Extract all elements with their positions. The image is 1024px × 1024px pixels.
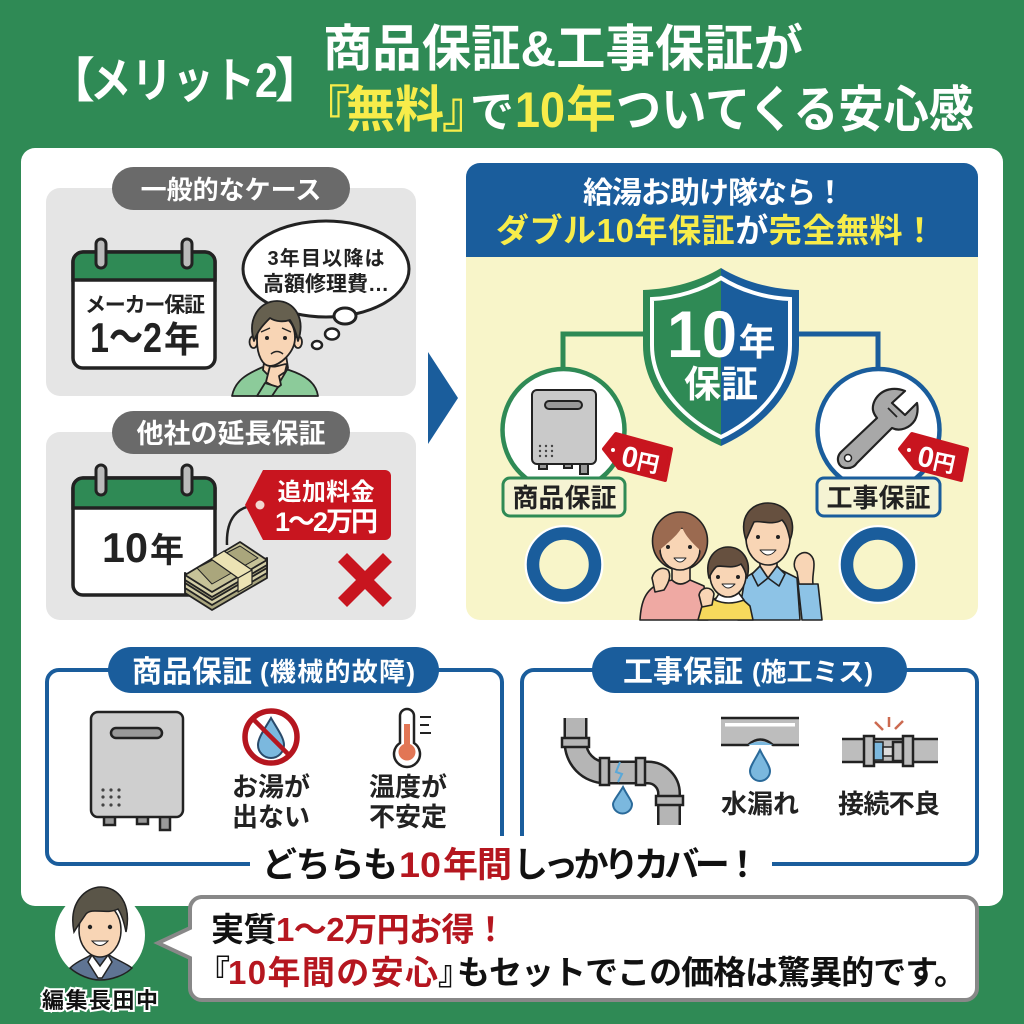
title: merit 2: 『	[300, 82, 350, 138]
product warranty	[502, 369, 671, 516]
heading: general case: 一般的なケース	[141, 175, 321, 205]
son	[698, 547, 753, 620]
icon: shield 10 year warranty: 年	[738, 322, 776, 363]
label: construction: 工事保証	[826, 483, 931, 513]
panel: other company extended warranty	[46, 411, 416, 620]
icon: thermometer	[394, 709, 431, 767]
banner: both covered for 10 years: しっかりカバー！	[513, 846, 760, 885]
tag: zero yen: 0円	[619, 441, 663, 480]
label: editor name: 編集長田中	[42, 988, 158, 1013]
faces	[666, 535, 780, 588]
thought bubble: 3年目以降は	[268, 247, 384, 270]
icon: calendar 1-2 years: メーカー保証	[85, 294, 205, 317]
title: merit 2: 【	[47, 55, 95, 108]
heading	[496, 177, 936, 249]
title: merit 2: 年	[566, 82, 616, 138]
text: water leak: 水漏れ	[721, 789, 799, 819]
heading: other company: 他社の延長保証	[136, 419, 326, 449]
icon: shield 10 year warranty	[643, 268, 799, 446]
main white panel	[21, 148, 1003, 906]
title: merit 2: 10	[515, 82, 565, 138]
icon: calendar 1-2 years: 年	[164, 319, 200, 360]
icon: bad connection	[842, 717, 938, 766]
banner: both covered for 10 years: どちらも	[262, 846, 398, 885]
icon: worried man	[232, 301, 318, 396]
construction warranty	[817, 369, 967, 516]
icon: water leak	[721, 718, 799, 781]
text: unstable temperature: 温度が	[369, 772, 447, 802]
avatar: editor tanaka	[42, 887, 158, 1013]
icon: no hot water	[245, 711, 297, 763]
heading: product warranty: (機械的故障)	[260, 657, 415, 687]
speech bubble: comment: 』	[438, 954, 471, 991]
text: bad connection: 接続不良	[838, 789, 940, 819]
label: product: 商品保証	[512, 483, 617, 513]
title: merit 2: ついてくる安心感	[616, 82, 974, 138]
circle mark left	[524, 525, 604, 604]
icon: shield 10 year warranty: 保証	[684, 364, 758, 405]
icon: leaking pipe	[562, 718, 683, 825]
text: no hot water: 出ない	[232, 802, 310, 832]
title: merit 2: 無料	[346, 82, 444, 138]
icon: calendar 1-2 years: 1～2	[90, 314, 162, 361]
heading: product warranty	[108, 647, 439, 693]
title: merit 2: で	[470, 88, 514, 137]
panel: product warranty details	[47, 647, 502, 864]
icon: calendar 10 years: 年	[150, 532, 184, 570]
mother	[640, 512, 708, 620]
speech bubble: comment	[158, 897, 977, 1000]
tag: zero yen	[900, 434, 967, 480]
father	[738, 503, 822, 620]
icon: price tag	[227, 470, 391, 545]
banner: both covered for 10 years: 10	[399, 846, 441, 885]
heading: other company	[112, 411, 350, 454]
banner: both covered for 10 years	[250, 836, 772, 885]
panel: general case	[46, 167, 416, 396]
icon: calendar 1-2 years	[73, 239, 215, 368]
title: merit 2: 』	[442, 82, 492, 138]
heading: construction warranty: 工事保証	[623, 656, 743, 689]
icon: price tag: 1～2万円	[275, 507, 378, 537]
thought bubble: 高額修理費…	[263, 273, 389, 296]
icon: calendar 10 years	[73, 465, 215, 595]
icon: price tag: 追加料金	[278, 479, 374, 506]
title: merit 2	[47, 21, 974, 138]
text: unstable temperature: 不安定	[369, 802, 447, 832]
panel: 10 year guarantee	[466, 163, 978, 620]
speech bubble: comment: もセットでこの価格は驚異的です。	[457, 954, 967, 991]
arrow	[428, 352, 458, 444]
icon: water heater large	[91, 712, 183, 830]
icon: wrench	[838, 389, 918, 468]
banner: both covered for 10 years: 年間	[443, 846, 512, 885]
speech bubble: comment: 10年間の安心	[228, 954, 438, 991]
connector lines	[563, 334, 645, 370]
tag: zero yen: 0円	[915, 441, 959, 480]
illustration: family	[640, 503, 822, 620]
circle mark right	[838, 525, 918, 604]
text: no hot water: お湯が	[232, 772, 310, 802]
title: merit 2: 】	[275, 55, 323, 108]
text: no hot water	[232, 772, 310, 832]
panel: construction warranty details	[522, 647, 977, 864]
title: merit 2: メリット2	[90, 55, 278, 108]
label: product	[503, 478, 625, 516]
tag: zero yen	[604, 434, 671, 480]
icon: shield 10 year warranty: 10	[667, 297, 737, 371]
speech bubble: comment: 実質1～2万円お得！	[211, 911, 507, 948]
thought bubble	[243, 221, 409, 349]
icon: red cross	[338, 553, 392, 607]
heading: general case	[112, 167, 350, 210]
icon: money stack	[185, 542, 267, 610]
heading: product warranty: 商品保証	[132, 656, 252, 689]
heading: ダブル10年保証が完全無料！	[496, 212, 936, 249]
text: unstable temperature	[369, 772, 447, 832]
icon: calendar 10 years: 10	[102, 524, 148, 571]
label: construction	[817, 478, 940, 516]
heading: construction warranty: (施工ミス)	[752, 657, 873, 687]
heading: construction warranty	[592, 647, 907, 693]
heading: 給湯お助け隊なら！	[583, 177, 845, 210]
title: merit 2: 商品保証&工事保証が	[323, 21, 803, 77]
speech bubble: comment: 『	[197, 954, 230, 991]
icon: water heater	[532, 390, 596, 474]
